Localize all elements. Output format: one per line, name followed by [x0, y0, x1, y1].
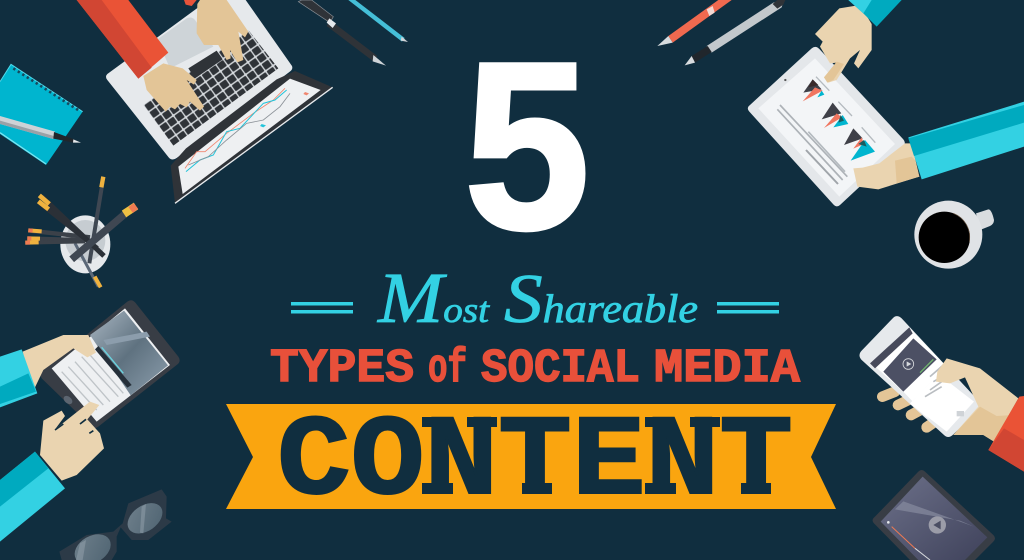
icon: finger tips	[882, 392, 937, 427]
banner word: CONTENT	[277, 399, 793, 528]
illustration: tablet, hands, pens and coffee	[657, 0, 1024, 269]
icon: notebook	[0, 64, 83, 165]
heading: types of social media: TYPES	[270, 343, 414, 396]
icon: pencil cup	[25, 177, 136, 287]
icon: right hand on keyboard	[184, 0, 248, 62]
heading: number five: 5	[464, 14, 590, 279]
heading: types of social media: MEDIA	[654, 343, 801, 396]
icon: silver pen	[685, 0, 785, 65]
icon: pointing hand	[815, 0, 902, 83]
decorative lines right	[717, 302, 779, 314]
icon: laptop	[106, 0, 333, 203]
heading: most shareable: Most	[377, 258, 490, 338]
icon: upper hand	[0, 335, 96, 407]
icon: cyan sleeve	[908, 102, 1024, 179]
icon: dark tablet	[40, 300, 180, 428]
icon: red sleeve	[77, 0, 168, 79]
icon: hand holding tablet	[853, 143, 919, 189]
illustration: phone in hand and video tablet	[859, 316, 1024, 560]
heading: types of social media	[270, 343, 801, 396]
icon: lower hand	[0, 402, 104, 542]
slab serifs on banner word	[422, 417, 771, 494]
icon: coffee cup	[914, 201, 994, 269]
heading: most shareable	[377, 258, 698, 338]
icon: left hand on keyboard	[143, 63, 204, 112]
icon: holding hand	[936, 358, 1018, 442]
decorative lines left	[291, 302, 353, 314]
heading: types of social media: SOCIAL	[481, 343, 640, 396]
icon: cyan pencil	[348, 0, 408, 42]
heading: types of social media: of	[428, 343, 467, 396]
icon: red pen	[657, 0, 732, 46]
ribbon shape	[226, 404, 836, 509]
banner: content	[226, 399, 836, 528]
icon: video tablet	[873, 470, 995, 560]
icon: smartphone	[859, 316, 980, 437]
illustration: laptop with hands and desk items	[0, 0, 408, 287]
icon: tablet with charts	[748, 47, 905, 206]
illustration: tablet with two hands and glasses	[0, 300, 180, 560]
icon: red sleeve	[988, 396, 1024, 472]
icon: glasses	[59, 489, 172, 560]
icon: black pen	[298, 0, 386, 66]
heading: most shareable: Shareable	[504, 261, 698, 338]
